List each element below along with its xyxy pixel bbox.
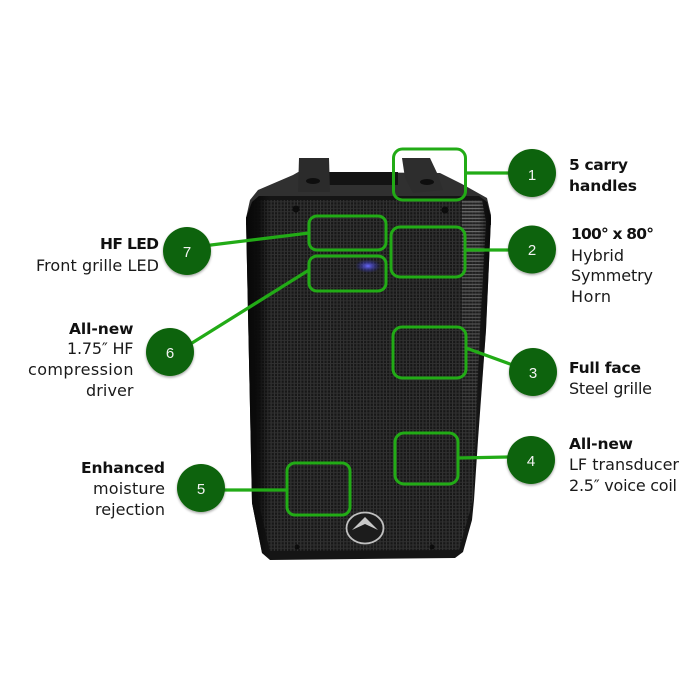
blue LED	[355, 259, 381, 273]
callout 2: Hybrid	[571, 246, 624, 265]
callout 6: All-new	[69, 320, 134, 338]
callout 6: driver	[86, 381, 134, 400]
callout 2: 100° x 80°	[571, 225, 654, 243]
callout 5: rejection	[95, 500, 165, 519]
steel grille	[252, 200, 486, 551]
callout 1: 5 carry	[569, 156, 628, 174]
grille bright right edge	[462, 200, 486, 423]
callout 3: Steel grille	[569, 379, 652, 398]
callout 1	[508, 149, 637, 197]
callout 3: Full face	[569, 359, 641, 377]
callout 6	[28, 320, 194, 400]
callout 4: 2.5″ voice coil	[569, 476, 677, 495]
callout 6: 1.75″ HF	[67, 339, 134, 358]
callout 6: 6	[166, 345, 174, 362]
callout 5: moisture	[93, 479, 165, 498]
highlight boxes	[287, 149, 466, 515]
callout 6: compression	[28, 360, 134, 379]
callout 4: All-new	[569, 435, 633, 453]
callout 2: 2	[528, 242, 536, 259]
cabinet body	[246, 196, 491, 560]
callout 3: 3	[529, 365, 537, 382]
callout 2: Horn	[571, 287, 611, 306]
grille screws	[292, 206, 448, 550]
logo badge	[346, 512, 384, 544]
speaker cabinet	[246, 158, 491, 560]
callout 7: HF LED	[100, 235, 159, 253]
side shading	[246, 196, 491, 560]
callout 4	[507, 435, 679, 495]
callout 7	[36, 227, 211, 275]
callout 5: 5	[197, 481, 205, 498]
callout 5: Enhanced	[81, 459, 165, 477]
callout 2: Symmetry	[571, 266, 653, 285]
right carry handle	[402, 158, 443, 193]
callout 2	[508, 225, 654, 306]
callout 4: LF transducer	[569, 455, 679, 474]
callout 7: 7	[183, 244, 191, 261]
connector lines	[192, 173, 510, 490]
callout 4: 4	[527, 453, 535, 470]
callout 7: Front grille LED	[36, 256, 159, 275]
callout 5	[81, 459, 225, 519]
callout 3	[509, 348, 652, 398]
top cap	[246, 171, 491, 225]
callout 1: handles	[569, 177, 637, 195]
left carry handle	[298, 158, 330, 192]
top handle recess	[329, 172, 398, 185]
callout 1: 1	[528, 167, 536, 184]
